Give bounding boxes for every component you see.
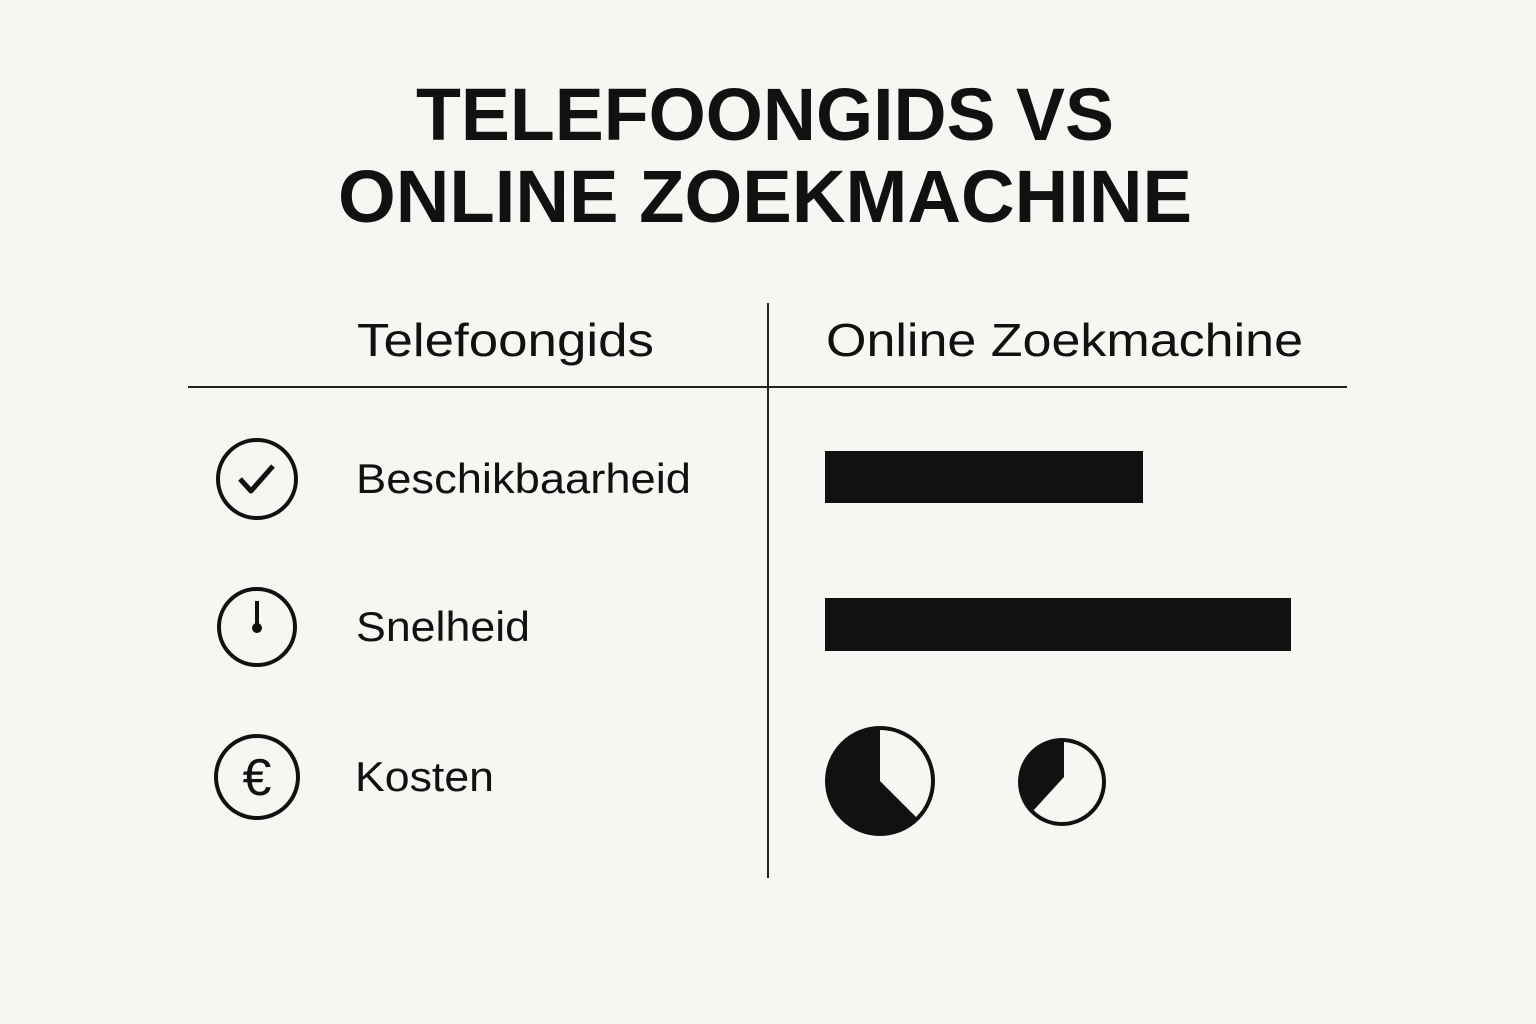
icon: clock xyxy=(219,589,295,665)
bar: Beschikbaarheid xyxy=(825,451,1143,503)
pie chart small xyxy=(1019,740,1104,824)
icon: euro: € xyxy=(243,749,272,807)
icon: check circle xyxy=(218,440,296,518)
column header: Online Zoekmachine: Online Zoekmachine xyxy=(826,314,1303,366)
column header: Telefoongids: Telefoongids xyxy=(357,314,654,366)
bar: Snelheid xyxy=(825,598,1291,651)
title xyxy=(338,73,1192,238)
label: Beschikbaarheid: Beschikbaarheid xyxy=(356,455,691,502)
icon: euro xyxy=(216,736,298,818)
title: TELEFOONGIDS VS xyxy=(416,73,1114,156)
title: ONLINE ZOEKMACHINE xyxy=(338,155,1192,238)
pie chart large xyxy=(826,728,933,834)
label: Kosten: Kosten xyxy=(355,753,494,800)
label: Snelheid: Snelheid xyxy=(356,603,530,650)
